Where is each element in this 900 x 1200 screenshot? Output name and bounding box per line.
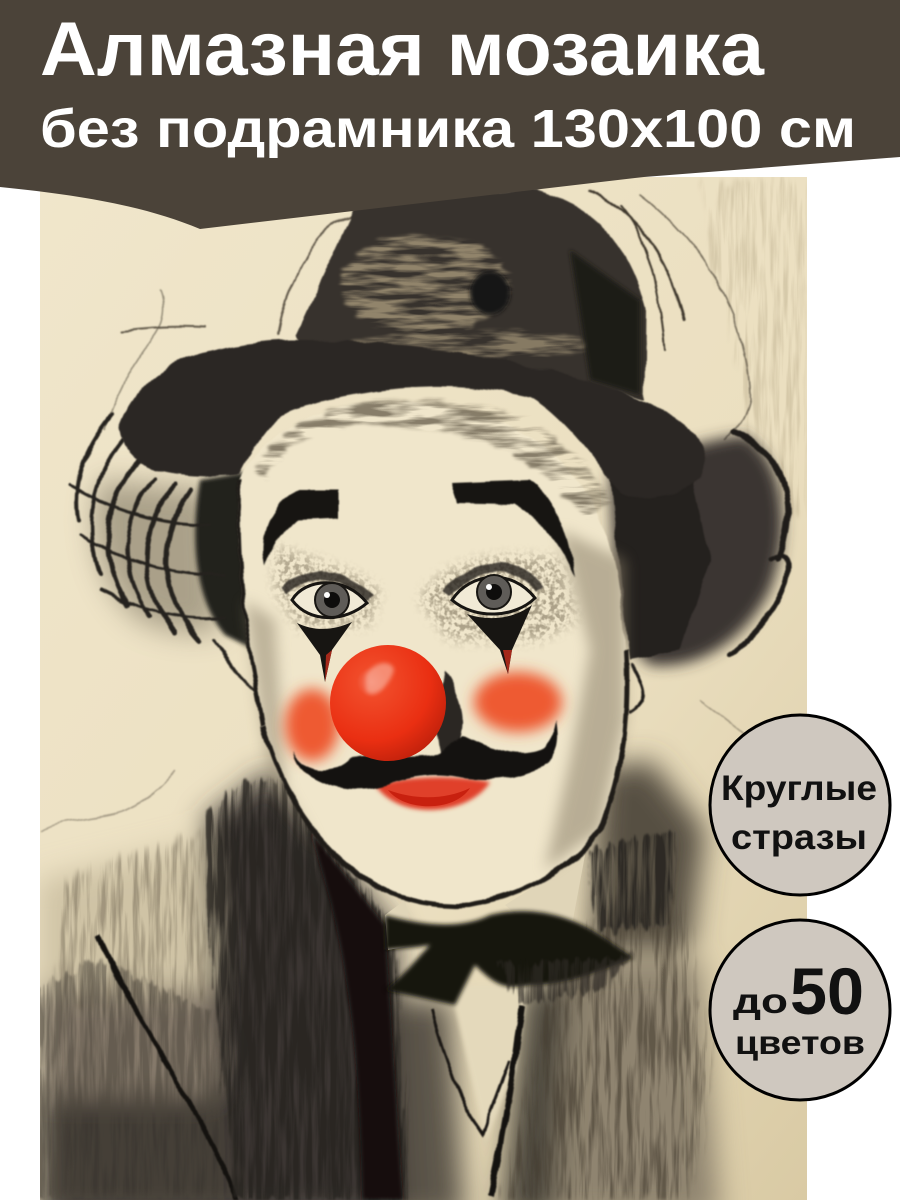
right shoulder dark bbox=[590, 830, 675, 930]
cheek right bbox=[474, 672, 562, 732]
forehead shadow bbox=[255, 399, 610, 520]
jacket tone underlay bbox=[40, 760, 720, 1200]
shirt front bbox=[450, 985, 528, 1140]
title: Алмазная мозаика bbox=[40, 7, 765, 92]
badge: up to 50 colours bbox=[710, 920, 890, 1100]
central dark column streaks bbox=[205, 779, 410, 1200]
canvas right side streaks bbox=[700, 180, 807, 520]
badge: up to 50 colours: 50 bbox=[790, 954, 864, 1028]
face base bbox=[239, 403, 626, 904]
nose shadow bbox=[436, 670, 463, 755]
header banner bbox=[0, 0, 900, 229]
hair right bbox=[610, 432, 789, 712]
jacket brush detail bbox=[40, 779, 710, 1200]
collar right bbox=[506, 855, 585, 918]
hat crown bbox=[296, 188, 646, 400]
eyebrow right bbox=[452, 480, 575, 578]
badge: round rhinestones: стразы bbox=[731, 818, 867, 857]
hair left bbox=[70, 415, 258, 690]
central black strip bbox=[310, 830, 403, 1200]
eyebrow left bbox=[263, 490, 338, 565]
badge: round rhinestones bbox=[710, 715, 890, 895]
subtitle: без подрамника 130х100 см bbox=[40, 99, 856, 159]
jacket lapel line bbox=[98, 935, 238, 1200]
left sleeve grey bbox=[40, 960, 250, 1200]
left shoulder mottling bbox=[60, 830, 210, 1010]
collar left bbox=[385, 906, 404, 950]
canvas background bbox=[40, 177, 807, 1200]
badge: up to 50 colours: до bbox=[733, 982, 788, 1021]
badge: up to 50 colours: цветов bbox=[735, 1024, 865, 1061]
jaw outline bbox=[263, 650, 627, 906]
painting: clown portrait bbox=[40, 177, 807, 1200]
hat brim bbox=[119, 340, 705, 500]
eye left bbox=[283, 576, 370, 682]
right jacket mottling bbox=[500, 900, 710, 1200]
eye right bbox=[447, 568, 540, 674]
badge: round rhinestones: Круглые bbox=[721, 769, 877, 808]
face shading bbox=[545, 530, 625, 870]
moustache bbox=[293, 720, 559, 790]
cheek left bbox=[285, 689, 339, 761]
red nose bbox=[330, 645, 446, 761]
shirt lines bbox=[432, 1010, 510, 1135]
mouth bbox=[375, 777, 490, 810]
background sketch lines bbox=[40, 190, 800, 830]
face bbox=[239, 399, 627, 906]
bow tie bbox=[385, 911, 635, 1005]
